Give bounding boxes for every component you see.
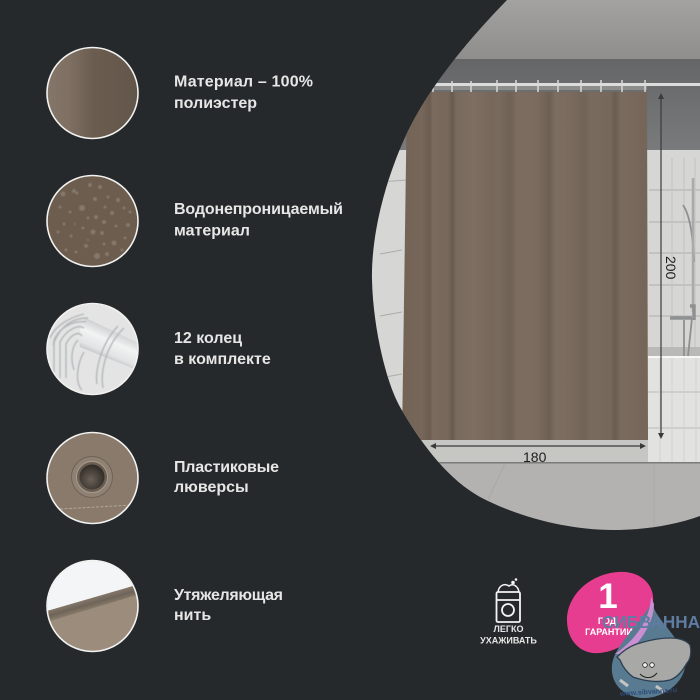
curtain shadow on wall (420, 440, 648, 462)
guarantee badge (567, 572, 653, 653)
icon: washing machine (496, 578, 520, 622)
feature 3: rings (47, 303, 271, 394)
label: weighted thread: нить (174, 607, 211, 624)
label: grommets: Пластиковые (174, 459, 279, 476)
label: rings: в комплекте (174, 351, 271, 368)
label: material: полиэстер (174, 95, 257, 112)
dimension: width 180 (430, 443, 646, 465)
thumbnail: hem (47, 560, 140, 652)
bathtub mascot (617, 638, 691, 681)
dimension: height 200 (658, 93, 679, 439)
thumbnail: grommet (47, 432, 138, 524)
feature 1: material (47, 48, 313, 139)
label: waterproof: материал (174, 222, 250, 240)
watermark logo (602, 597, 700, 698)
label: material: Материал – 100% (174, 74, 313, 90)
label: weighted thread: Утяжеляющая (174, 587, 283, 604)
floor (438, 462, 700, 530)
droplet (612, 602, 685, 698)
thumbnail: water drops (47, 175, 138, 266)
shower and faucet (670, 178, 694, 356)
pink blob (567, 572, 653, 653)
label: one year: 1 (598, 577, 618, 616)
lilac edge (615, 597, 654, 654)
guarantee badge: ГОД (598, 616, 617, 626)
mascot face (640, 663, 657, 678)
mascot feet (620, 680, 664, 692)
thumbnail: rod and rings (47, 303, 142, 394)
guarantee badge: ГАРАНТИИ (585, 627, 633, 637)
care badge (480, 578, 537, 646)
label: grommets: люверсы (174, 479, 249, 496)
upper wall (370, 59, 700, 159)
feature 4: grommets (47, 432, 279, 524)
label: easy care: ЛЕГКО (494, 624, 523, 634)
label: rings: 12 колец (174, 330, 242, 347)
feature 2: waterproof (47, 175, 343, 266)
photo: bathroom with curtain (370, 0, 700, 533)
thumbnail: fabric (47, 48, 138, 139)
curtain rings (433, 80, 645, 92)
site name: www.sibvanna.ru (619, 687, 677, 698)
brand name: СИБВАННА (602, 612, 700, 632)
feature 5: weighted thread (47, 560, 283, 652)
tiled wall (370, 150, 700, 463)
curtain fabric (402, 92, 648, 440)
label: waterproof: Водонепроницаемый (174, 201, 343, 218)
dimension: width 180: 180 (523, 449, 547, 465)
label: easy care: УХАЖИВАТЬ (480, 636, 537, 646)
dimension: height 200: 200 (663, 256, 679, 280)
bath (648, 347, 700, 463)
curtain top scallops (434, 86, 647, 90)
curtain rod (434, 83, 700, 86)
ceiling (454, 0, 700, 59)
